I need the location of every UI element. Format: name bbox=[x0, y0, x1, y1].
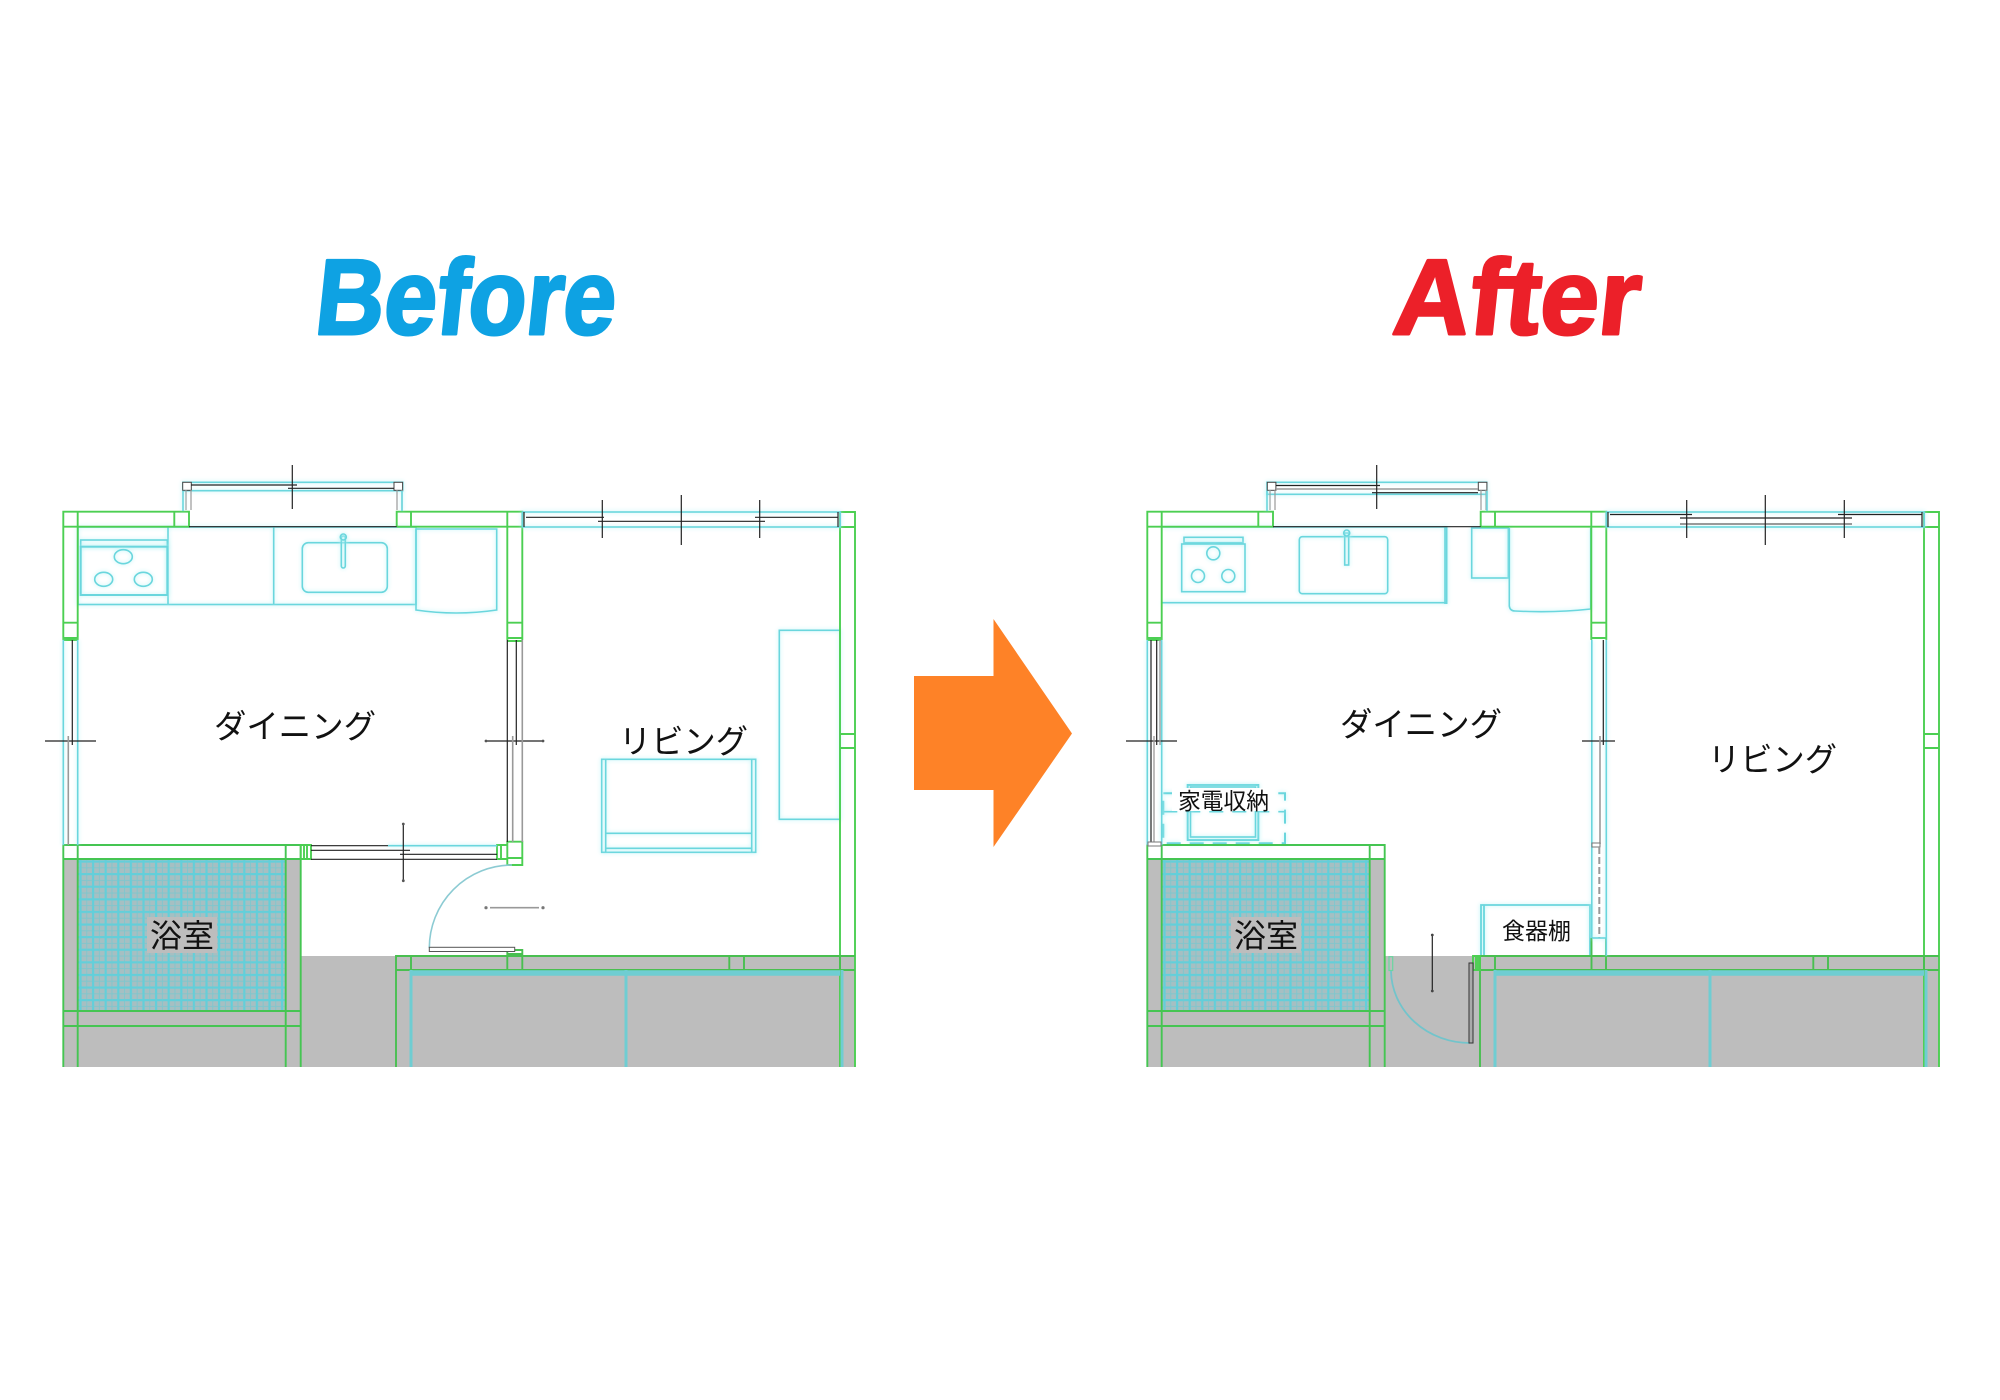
arrow: before to after bbox=[914, 619, 1072, 847]
window: dining left bbox=[1126, 640, 1177, 846]
label: living: リビング bbox=[1708, 741, 1837, 778]
bay window: kitchen bbox=[183, 465, 403, 527]
icon: sink bbox=[1299, 530, 1388, 594]
window: dining left bbox=[45, 640, 96, 845]
gray exterior area bbox=[1147, 859, 1939, 1067]
title: After: After bbox=[1389, 237, 1647, 357]
label: appliance storage: 家電収納 bbox=[1178, 788, 1269, 814]
exterior wall band bbox=[411, 970, 842, 1067]
walls bbox=[1147, 512, 1939, 1067]
label: bathroom: 浴室 bbox=[150, 918, 214, 954]
icon: refrigerator bbox=[416, 529, 497, 613]
icon: stove bbox=[1182, 537, 1245, 592]
icon: sofa bbox=[602, 759, 756, 852]
panel: after floor plan bbox=[1126, 465, 1939, 1067]
icon: stove bbox=[81, 540, 167, 595]
sliding door: below dining bbox=[311, 823, 497, 882]
label: dining: ダイニング bbox=[214, 708, 376, 745]
walls bbox=[63, 512, 855, 1067]
entrance door bbox=[429, 865, 545, 952]
cupboard bbox=[1481, 905, 1590, 956]
window: living room top bbox=[1606, 495, 1924, 545]
icon: sink bbox=[302, 534, 387, 592]
label: bathroom: 浴室 bbox=[1234, 918, 1298, 954]
bay window: kitchen bbox=[1267, 465, 1487, 527]
living room cabinet bbox=[779, 630, 840, 819]
label: living: リビング bbox=[619, 723, 748, 760]
bathroom tile grid bbox=[1162, 859, 1370, 1010]
window: dining to living partition bbox=[1582, 640, 1615, 956]
title: Before: Before bbox=[311, 237, 623, 357]
panel: before floor plan bbox=[45, 465, 855, 1067]
entrance door bbox=[1389, 934, 1473, 1043]
kitchen counter bbox=[78, 527, 416, 604]
label: cupboard: 食器棚 bbox=[1502, 918, 1571, 944]
label: dining: ダイニング bbox=[1340, 706, 1502, 743]
exterior wall band bbox=[1495, 970, 1926, 1067]
bathroom tile grid bbox=[78, 859, 286, 1010]
appliance storage bbox=[1163, 785, 1285, 843]
small cabinet bbox=[1472, 528, 1508, 578]
icon: refrigerator bbox=[1509, 528, 1591, 612]
window: living room top bbox=[522, 495, 840, 545]
sliding door: dining to living bbox=[485, 640, 544, 842]
gray exterior area bbox=[63, 859, 855, 1067]
kitchen counter bbox=[1162, 527, 1447, 604]
